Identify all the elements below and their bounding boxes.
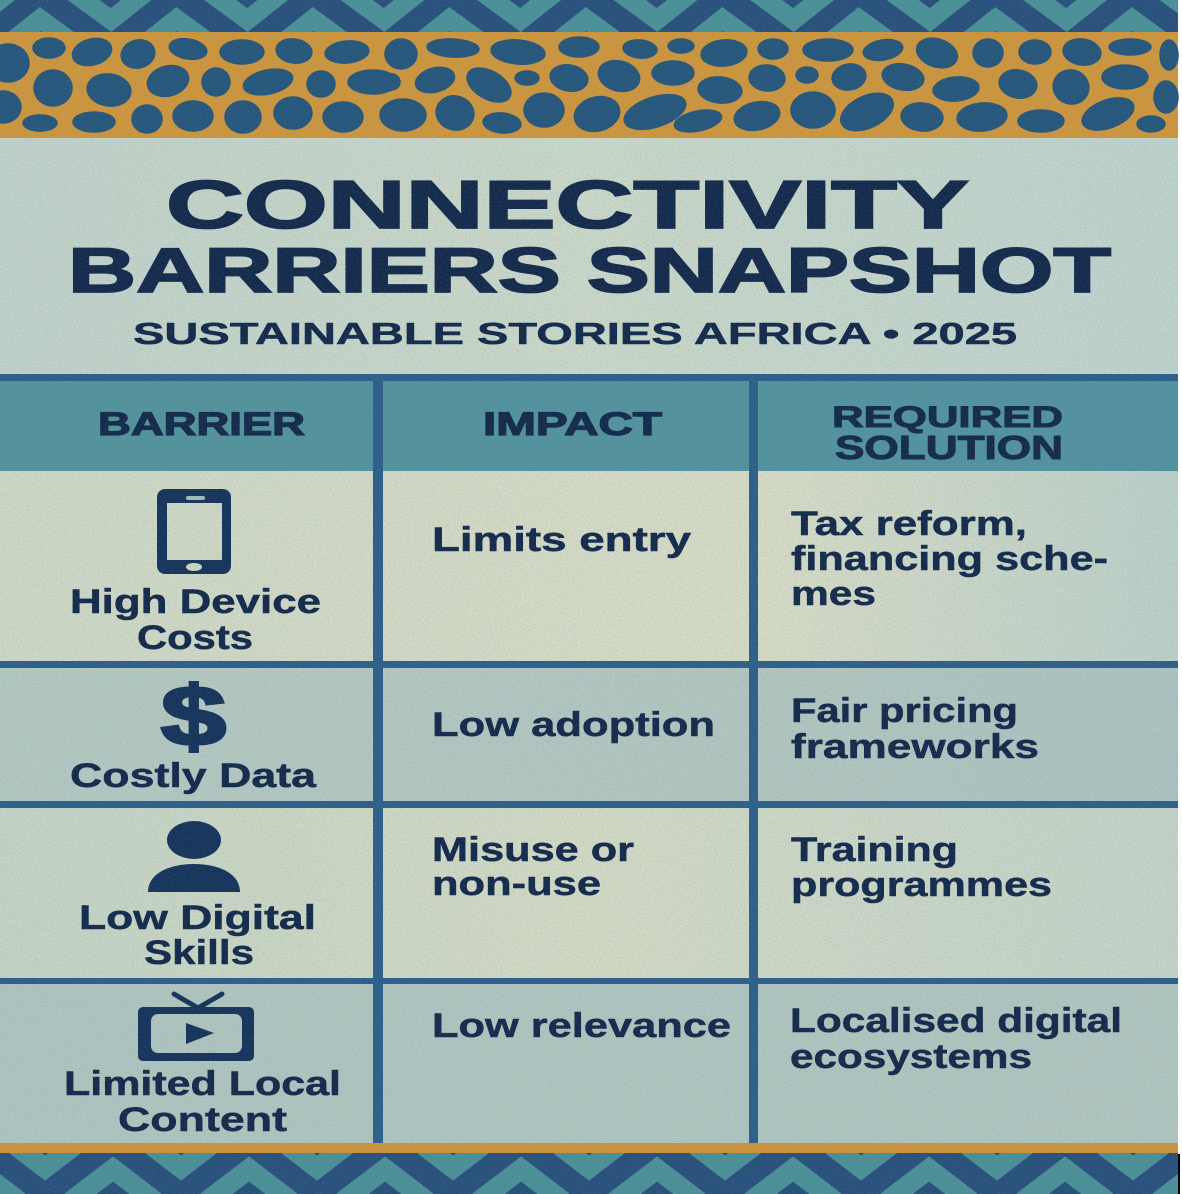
row: limited local content: ecosystems [790,1038,1032,1076]
title: CONNECTIVITY [166,167,969,243]
row: costly data: Low adoption [432,706,715,744]
row: costly data: frameworks [791,728,1039,766]
icon: person [148,821,240,892]
row: limited local content: Low relevance [432,1007,731,1045]
table header row: SOLUTION [835,429,1063,466]
row: low digital skills: Skills [144,934,254,972]
icon: smartphone [157,489,231,574]
row: low digital skills: Low Digital [79,899,316,937]
table header row [0,381,1178,471]
row: high device costs: High Device [70,583,321,621]
row: low digital skills: Training [791,831,958,869]
row: limited local content: Content [118,1101,287,1139]
top zigzag border [0,0,1182,71]
row: costly data: Costly Data [70,757,317,795]
row: limited local content: Limited Local [64,1065,341,1103]
row: costly data: Fair pricing [791,692,1018,730]
row: low digital skills: programmes [791,866,1052,904]
table header row: BARRIER [98,406,305,442]
table header row: IMPACT [483,406,663,442]
icon: television [138,994,254,1061]
bottom orange stripe [0,1143,1178,1153]
row: low digital skills: non-use [432,865,601,903]
row: high device costs: Tax reform, [791,505,1027,543]
row: high device costs: Limits entry [432,521,691,559]
title panel background [0,138,1178,375]
row: limited local content: Localised digital [790,1002,1122,1040]
row: high device costs [0,471,1178,661]
subtitle: SUSTAINABLE STORIES AFRICA • 2025 [133,316,1017,351]
row: high device costs: Costs [137,619,253,657]
row: limited local content [0,984,1178,1143]
row: low digital skills [0,807,1178,978]
title [68,167,1111,306]
row: costly data [0,667,1178,801]
table [0,374,1178,1143]
table header row: REQUIRED [832,401,1063,434]
title: BARRIERS SNAPSHOT [68,236,1111,306]
row: high device costs: mes [791,575,876,613]
bottom zigzag border [0,1116,1182,1194]
row: low digital skills: Misuse or [432,831,634,869]
orange spotted band [0,32,1178,138]
row: high device costs: financing sche- [791,540,1108,578]
icon: dollar sign: $ [161,669,226,763]
